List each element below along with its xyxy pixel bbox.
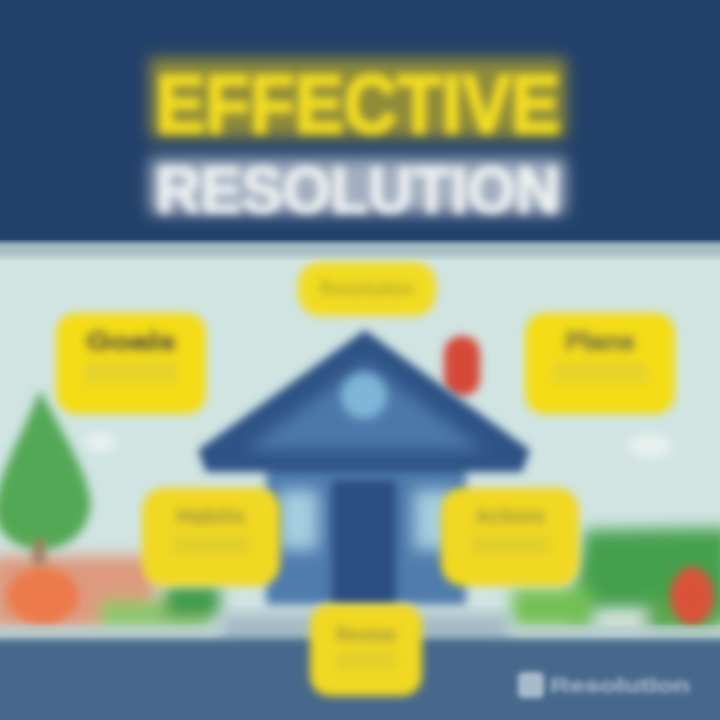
title line 1 highlight — [150, 58, 566, 138]
callout: upper right — [525, 313, 675, 414]
callout: lower left: Habits — [176, 503, 246, 530]
ground: right hedge — [570, 528, 720, 620]
callout: lower right — [441, 488, 579, 586]
window right — [414, 490, 454, 550]
house body — [266, 460, 466, 605]
door — [332, 480, 396, 605]
icon: small cloud left — [84, 432, 116, 452]
sky background — [0, 240, 720, 640]
callout: top: Resolution — [320, 276, 414, 301]
callout: bottom — [310, 604, 422, 696]
title line 2 highlight — [150, 158, 566, 214]
house — [198, 330, 530, 605]
icon: chimney — [444, 336, 480, 396]
title line 1: EFFECTIVE — [156, 59, 560, 150]
callout: upper left — [56, 313, 206, 414]
road — [0, 614, 720, 720]
icon: red shrub — [670, 567, 714, 625]
roof panel — [245, 362, 485, 450]
window left — [278, 490, 318, 550]
ground: left garden — [0, 556, 720, 630]
callout: upper left: Goals — [86, 326, 176, 356]
logo: Resolution — [550, 676, 690, 697]
icon: small cloud right — [628, 434, 672, 458]
logo — [518, 672, 690, 698]
attic window — [341, 373, 387, 419]
icon: orange shrub — [7, 568, 79, 624]
callout: bottom: Review — [336, 622, 397, 647]
roof — [198, 330, 530, 472]
callout: upper right: Plans — [565, 326, 635, 356]
header band — [0, 0, 720, 256]
title line 2: RESOLUTION — [156, 154, 560, 226]
title — [150, 58, 566, 226]
callout: lower left — [142, 488, 280, 586]
icon: tree — [0, 390, 90, 566]
callout: lower right: Actions — [475, 503, 545, 530]
callout: top — [298, 262, 436, 316]
